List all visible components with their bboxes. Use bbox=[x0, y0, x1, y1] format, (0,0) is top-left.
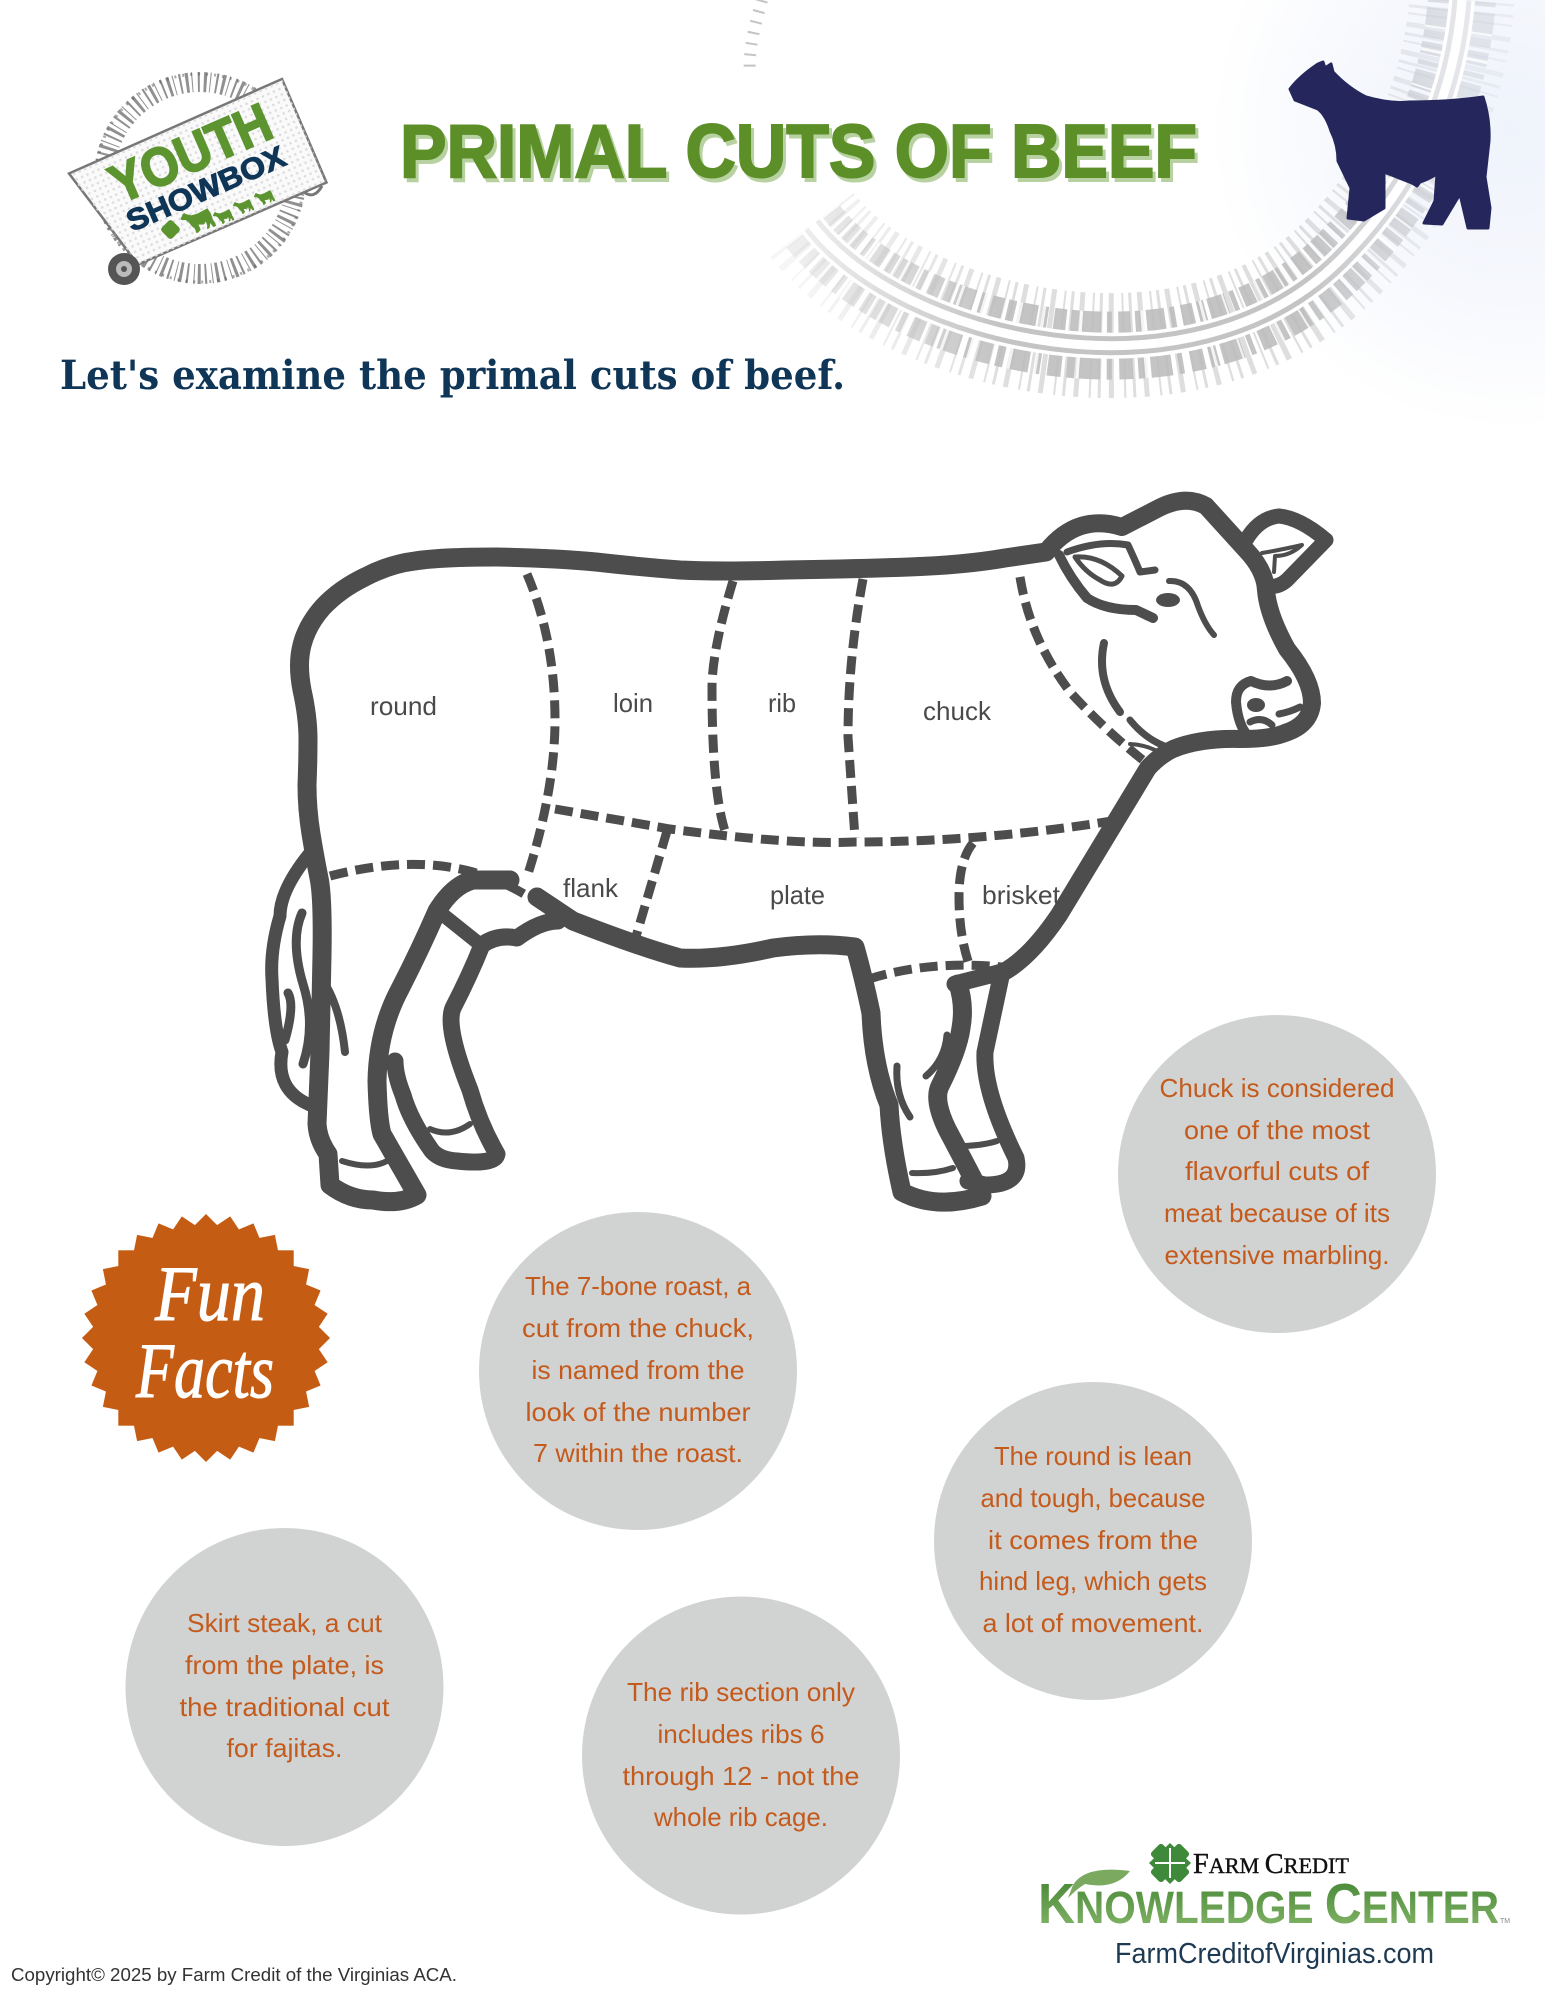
label: flank: flank bbox=[563, 873, 619, 903]
fact circle: rib: whole rib cage. bbox=[653, 1802, 828, 1832]
cow outline bbox=[272, 501, 1326, 1202]
fact circle: chuck: extensive marbling. bbox=[1164, 1240, 1390, 1270]
fact circle: 7-bone roast: look of the number bbox=[526, 1397, 751, 1427]
rib and chuck bbox=[848, 579, 863, 838]
fact circle: round: hind leg, which gets bbox=[979, 1566, 1207, 1596]
round and loin bbox=[527, 574, 555, 877]
fact circle: skirt steak: from the plate, is bbox=[185, 1650, 384, 1680]
flank and plate bbox=[635, 831, 667, 940]
hind near leg bbox=[317, 880, 510, 1202]
fact circle: round: it comes from the bbox=[988, 1525, 1198, 1555]
rump and back line bbox=[300, 552, 1046, 955]
loin and rib bbox=[712, 581, 733, 831]
label: round: round bbox=[370, 691, 437, 721]
cut labels bbox=[370, 688, 1061, 910]
fact circle: round: and tough, because bbox=[980, 1483, 1206, 1513]
background glow bbox=[1200, 0, 1545, 430]
far front leg bbox=[955, 972, 1017, 1185]
eye bbox=[1156, 593, 1180, 607]
logo word: SHOWBOX: SHOWBOX bbox=[122, 140, 291, 238]
wordmark: Knowledge Center: KNOWLEDGE CENTER bbox=[1038, 1872, 1499, 1936]
logo: Farm Credit Knowledge Center bbox=[1038, 1843, 1510, 1970]
badge: fun facts bbox=[82, 1214, 330, 1462]
hind bar and hoof lines bbox=[442, 914, 477, 942]
front hoof lines bbox=[912, 1141, 997, 1173]
website: FarmCreditofVirginias.com bbox=[1115, 1938, 1434, 1970]
icon: clover diamond bbox=[1149, 1843, 1191, 1884]
label: plate: plate bbox=[770, 880, 825, 910]
title: PRIMAL CUTS OF BEEF bbox=[400, 109, 1197, 193]
fact circle: chuck: flavorful cuts of bbox=[1185, 1156, 1370, 1186]
round lower bbox=[330, 864, 547, 909]
head and neck bbox=[1002, 501, 1312, 973]
fact circle: skirt steak bbox=[126, 1528, 444, 1846]
muzzle bbox=[1236, 681, 1287, 736]
badge word: Fun: Fun bbox=[154, 1250, 265, 1337]
belly and near front leg bbox=[537, 897, 982, 1202]
tail bbox=[272, 853, 310, 1105]
fact circle: 7-bone roast bbox=[479, 1212, 797, 1530]
fact circle: 7-bone roast: is named from the bbox=[532, 1355, 744, 1385]
cow diagram bbox=[272, 501, 1326, 1202]
fact circle: chuck: one of the most bbox=[1184, 1115, 1371, 1145]
wordmark: Farm Credit: FARM CREDIT bbox=[1193, 1849, 1350, 1880]
trademark: TM bbox=[1500, 1918, 1510, 1925]
logo: Youth Showbox bbox=[69, 74, 326, 285]
fact circle: round: a lot of movement. bbox=[982, 1608, 1204, 1638]
tire ring bbox=[96, 74, 304, 282]
fact circle: skirt steak: for fajitas. bbox=[226, 1733, 342, 1763]
fact circle: rib bbox=[582, 1596, 900, 1914]
label: loin: loin bbox=[613, 688, 653, 718]
logo word: YOUTH: YOUTH bbox=[101, 92, 281, 215]
copyright: Copyright© 2025 by Farm Credit of the Virginias ACA. bbox=[11, 1965, 457, 1985]
sign board bbox=[69, 79, 326, 264]
trailer wheel bbox=[108, 253, 140, 285]
starburst bbox=[82, 1214, 330, 1462]
fact circle: 7-bone roast: 7 within the roast. bbox=[533, 1438, 743, 1468]
fact circle: round: The round is lean bbox=[994, 1441, 1192, 1471]
icon: navy steer silhouette bbox=[1290, 62, 1490, 228]
label: chuck: chuck bbox=[923, 696, 992, 726]
far ear bbox=[1246, 516, 1326, 586]
fact circle: rib: includes ribs 6 bbox=[658, 1719, 824, 1749]
neck line bbox=[1020, 577, 1144, 761]
icon: leaf bbox=[1068, 1870, 1130, 1898]
fact circle: chuck: meat because of its bbox=[1164, 1198, 1390, 1228]
midline bbox=[555, 809, 1112, 842]
fact circle: 7-bone roast: The 7-bone roast, a bbox=[525, 1271, 752, 1301]
fact circle: chuck bbox=[1118, 1015, 1436, 1333]
fact circle: chuck: Chuck is considered bbox=[1160, 1073, 1394, 1103]
cut lines bbox=[330, 574, 1144, 979]
badge word: Facts: Facts bbox=[135, 1327, 274, 1414]
label: rib: rib bbox=[768, 688, 796, 718]
front leg tufts bbox=[897, 1035, 947, 1117]
fact circle: 7-bone roast: cut from the chuck, bbox=[522, 1313, 754, 1343]
fact circle: rib: The rib section only bbox=[627, 1677, 855, 1707]
fact circle: skirt steak: the traditional cut bbox=[180, 1692, 390, 1722]
hind far leg bbox=[395, 921, 558, 1162]
fact circle: rib: through 12 - not the bbox=[622, 1761, 860, 1791]
trailer hitch bbox=[304, 186, 322, 195]
logo animals bbox=[160, 187, 275, 240]
fact circle: skirt steak: Skirt steak, a cut bbox=[187, 1608, 383, 1638]
subtitle: Let's examine the primal cuts of beef. bbox=[60, 352, 845, 399]
brisket bbox=[959, 843, 973, 964]
front leg bbox=[869, 965, 1002, 979]
label: brisket: brisket bbox=[982, 880, 1061, 910]
title: PRIMAL CUTS OF BEEF bbox=[403, 113, 1200, 197]
near ear bbox=[1059, 555, 1153, 618]
cheek and jaw bbox=[1102, 643, 1120, 712]
tire track bbox=[750, 0, 1462, 346]
fact circle: round bbox=[934, 1382, 1252, 1700]
eyebrow bbox=[1169, 581, 1214, 635]
